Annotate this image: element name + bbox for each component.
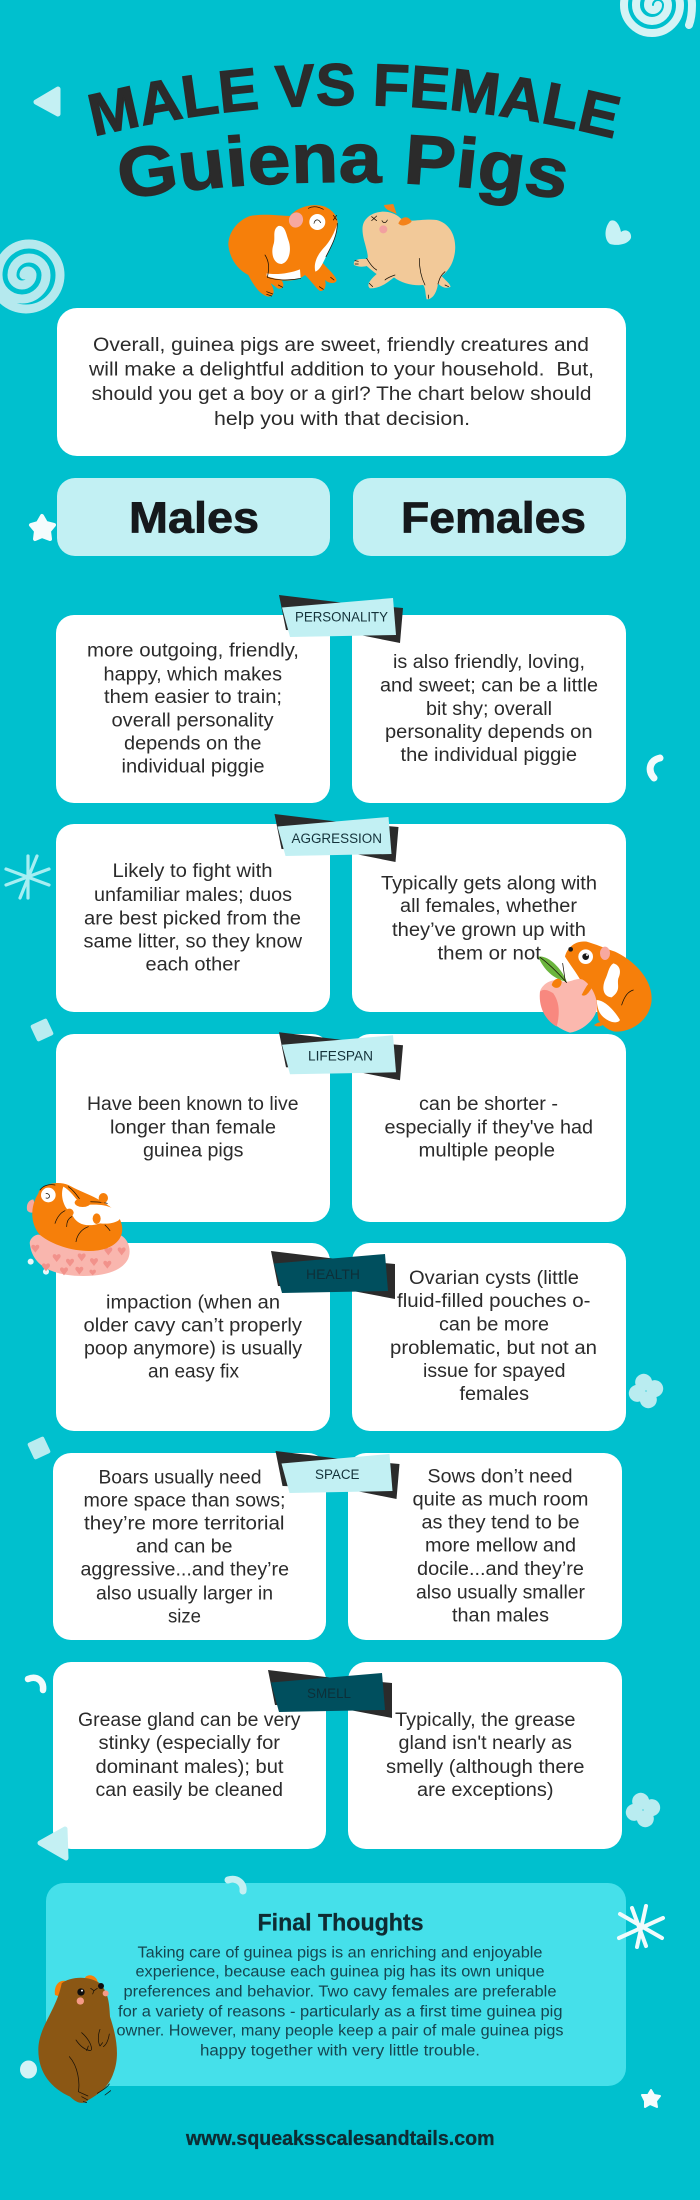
card: female health: females [460,1384,529,1405]
card: female health: Ovarian cysts (little [409,1268,579,1289]
card: male space: more space than sows; [84,1490,286,1512]
card: male personality: depends on the [124,734,262,754]
decoration: hook arc [28,1678,43,1690]
card: female smell [348,1662,622,1849]
card: male personality: happy, which makes [104,664,282,686]
tag: lifespan [279,1032,403,1080]
card: male lifespan: Have been known to live [87,1094,298,1115]
tag: aggression [274,814,398,862]
card: female health [352,1243,626,1431]
card: male space [53,1453,326,1640]
card: female space [348,1453,622,1640]
intro text: will make a delightful addition to your household. But, [88,360,594,380]
intro text: should you get a boy or a girl? The chart below should [92,384,592,405]
illustration: peach guinea pig [354,204,455,299]
card: female health: fluid-filled pouches o- [397,1291,590,1312]
card: male space: they’re more territorial [84,1514,284,1534]
title [88,63,621,206]
decoration: square one [30,1018,54,1042]
card: female personality: and sweet; can be a little [380,676,598,696]
decoration: small white star [642,2090,660,2107]
card: female space: more mellow and [425,1536,576,1556]
card: male health: older cavy can’t properly [84,1316,303,1336]
decoration: square two [27,1436,51,1460]
decoration: arc right of personality [650,758,660,778]
card: female smell: Typically, the grease [395,1710,576,1731]
tag: smell: SMELL [307,1686,351,1701]
card: male health [56,1243,330,1431]
card: female personality [352,615,626,803]
card: female aggression: all females, whether [400,896,578,917]
card: female aggression: Typically gets along with [381,874,597,894]
card: male aggression: unfamiliar males; duos [94,885,292,906]
card: male space: also usually larger in [96,1584,273,1604]
card: female lifespan: multiple people [418,1140,555,1162]
card: male smell: stinky (especially for [98,1733,281,1754]
website url: www.squeaksscalesandtails.com [185,2128,494,2150]
tag: space [276,1451,400,1499]
card: male health: poop anymore) is usually [84,1338,303,1360]
illustration: brown guinea pig [38,1975,117,2103]
decoration: arc over final panel [228,1879,243,1891]
card: male health: an easy fix [148,1362,239,1382]
card: male lifespan [56,1034,330,1222]
tag: personality: PERSONALITY [295,610,388,624]
final thoughts body: happy together with very little trouble. [200,2042,480,2060]
card: female personality: bit shy; overall [426,699,552,720]
final thoughts body: for a variety of reasons - particularly as a first time guinea pig [118,2004,562,2020]
row: aggression [56,814,626,1012]
intro text [88,335,594,430]
final thoughts body [116,1944,564,2060]
card: female space: quite as much room [412,1490,588,1510]
row: lifespan [56,1032,626,1222]
card: female space: as they tend to be [422,1512,580,1534]
row: smell [53,1662,622,1849]
card: male smell: can easily be cleaned [96,1780,283,1801]
card: male lifespan: guinea pigs [143,1140,244,1162]
intro text: help you with that decision. [214,409,470,430]
decoration: light asterisk [6,856,49,898]
card: female lifespan [352,1034,626,1222]
card: female lifespan: especially if they've had [384,1118,593,1138]
card: male aggression: Likely to fight with [112,861,272,882]
card: male smell [53,1662,326,1849]
illustration: orange guinea pig [228,205,338,297]
illustration: guinea pig on cushion [27,1183,130,1276]
panel: final thoughts [46,1883,626,2086]
decoration: heart [606,220,631,245]
row: personality [56,595,626,803]
header: Females: Females [401,494,586,542]
card: male smell: dominant males); but [96,1757,284,1778]
row: space [53,1451,622,1640]
card: female health: issue for spayed [423,1361,566,1382]
decoration: clover two [622,1789,664,1831]
title line: MALE VS FEMALE: MALE VS FEMALE [88,63,621,139]
card: female lifespan: can be shorter - [419,1094,558,1115]
card: male personality [56,615,330,803]
tag: lifespan: LIFESPAN [308,1048,373,1064]
title line: Guiena Pigs: Guiena Pigs [120,134,566,206]
card: female smell: gland isn't nearly as [398,1733,572,1754]
card: female aggression: they’ve grown up with [392,920,586,941]
decoration: clover one [625,1370,667,1412]
card: female space: Sows don’t need [428,1466,572,1488]
illustration: guinea pig with peach [538,941,652,1033]
header: Females [353,478,626,556]
card: female personality: personality depends on [385,722,592,743]
intro panel [57,308,626,456]
final thoughts body: experience, because each guinea pig has its own unique [136,1964,544,1980]
card: female personality: is also friendly, loving, [393,652,585,673]
final thoughts body: owner. However, many people keep a pair of male guinea pigs [116,2022,564,2040]
header: Males: Males [129,494,259,542]
decoration: top right spiral [624,0,692,33]
decoration: pale circle [20,2060,37,2078]
card: female aggression [352,824,626,1012]
card: male aggression [56,824,330,1012]
decoration: left lower triangle [40,1829,66,1858]
decoration: top left triangle [36,89,58,114]
card: female space: also usually smaller [416,1582,586,1604]
card: male smell: Grease gland can be very [78,1710,301,1731]
decoration: white asterisk [619,1906,663,1947]
card: female space: than males [452,1606,549,1626]
card: male personality: overall personality [112,710,274,732]
card: female aggression: them or not [438,944,542,964]
tag: health: HEALTH [306,1267,360,1282]
card: male space: size [168,1606,201,1628]
card: female space: docile...and they’re [417,1559,584,1580]
intro text: Overall, guinea pigs are sweet, friendly creatures and [93,335,589,356]
tag: personality [279,595,403,643]
card: male aggression: are best picked from the [84,908,301,930]
header: Males [57,478,330,556]
tag: smell [268,1670,392,1718]
heading: final thoughts: Final Thoughts [258,1910,424,1936]
card: female health: can be more [439,1314,549,1336]
card: male lifespan: longer than female [110,1118,276,1138]
tag: health [271,1251,395,1299]
card: female smell: are exceptions) [417,1780,554,1801]
tag: aggression: AGGRESSION [292,831,382,846]
card: female personality: the individual piggie [400,745,577,766]
card: male aggression: each other [146,954,241,976]
card: male health: impaction (when an [106,1292,280,1314]
decoration: star left of males header [31,516,54,539]
card: male personality: more outgoing, friendly, [87,640,299,662]
card: male space: and can be [136,1536,232,1558]
card: female health: problematic, but not an [390,1338,597,1359]
final thoughts body: preferences and behavior. Two cavy females are preferable [124,1984,556,2000]
row: health [56,1243,626,1431]
tag: space: SPACE [315,1467,360,1482]
card: male space: aggressive...and they’re [80,1560,289,1580]
card: male personality: them easier to train; [104,687,282,708]
card: male aggression: same litter, so they know [84,932,302,952]
card: male space: Boars usually need [98,1468,262,1488]
card: female smell: smelly (although there [386,1757,584,1778]
card: male personality: individual piggie [122,756,264,778]
decoration: left spiral [0,244,60,309]
final thoughts body: Taking care of guinea pigs is an enriching and enjoyable [138,1944,542,1962]
